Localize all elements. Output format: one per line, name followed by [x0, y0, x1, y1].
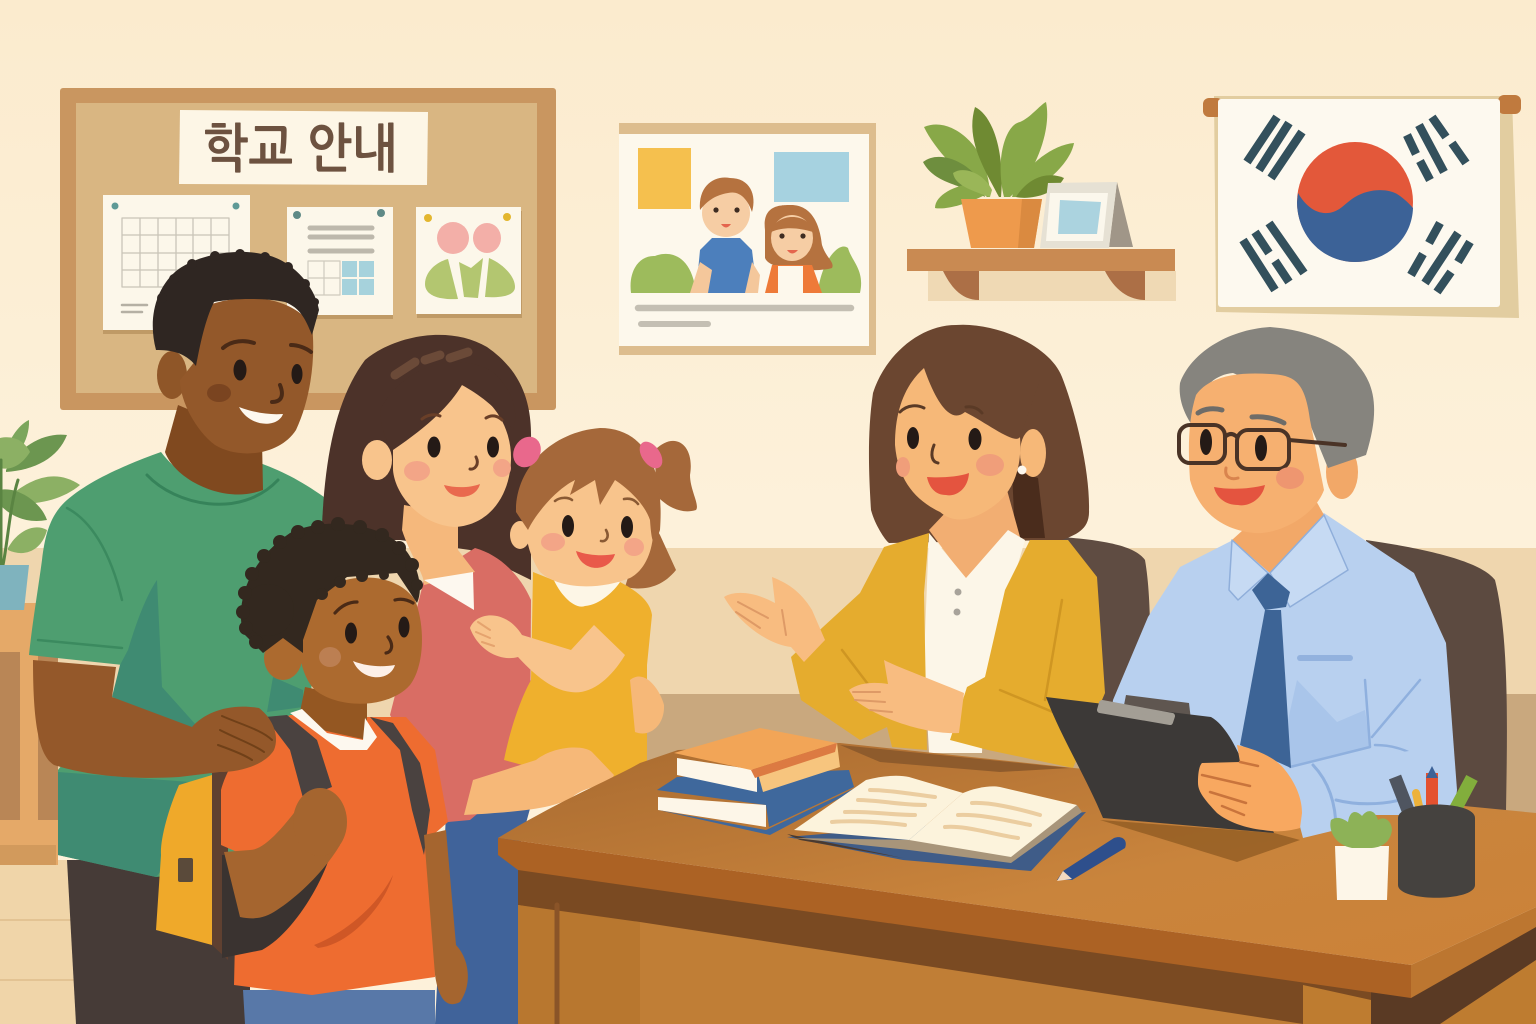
chair: principal	[1366, 540, 1507, 812]
principal neck	[1232, 490, 1324, 573]
mother ear	[362, 440, 392, 480]
girl pigtail	[655, 441, 697, 511]
clipboard shadow	[1100, 820, 1300, 862]
principal ear	[1326, 445, 1358, 499]
principal tie	[1240, 573, 1291, 768]
girl hair ties	[508, 432, 667, 472]
backpack body	[222, 850, 332, 958]
girl ear	[510, 521, 530, 549]
father eyes	[234, 360, 302, 384]
girl arm and hand	[470, 615, 625, 692]
sleeve cuff line	[1313, 765, 1400, 830]
boy collar	[290, 709, 377, 750]
boy eyes	[345, 616, 410, 644]
stacked books	[657, 728, 855, 835]
principal eyes	[1200, 429, 1267, 461]
boy hair	[236, 517, 423, 653]
principal pocket	[1300, 655, 1350, 661]
plant leaves	[923, 102, 1074, 208]
teacher mouth	[927, 473, 969, 495]
calendar paper	[103, 195, 250, 334]
principal mouth	[1214, 485, 1265, 505]
teacher blouse	[924, 530, 1025, 753]
shelf shadow	[928, 271, 1176, 301]
desk	[498, 743, 1536, 1024]
teacher brows and nose	[900, 406, 982, 463]
boy face	[299, 578, 422, 704]
teacher eyes	[907, 427, 982, 450]
boy ear	[264, 636, 302, 680]
board title paper	[179, 110, 428, 185]
principal nose	[1226, 468, 1238, 479]
mother jeans	[435, 805, 531, 1024]
teacher cardigan	[791, 533, 1105, 768]
teacher resting hand	[849, 660, 964, 733]
bulletin board	[60, 88, 556, 410]
father ear	[157, 351, 187, 399]
mother eyes	[428, 436, 499, 458]
left potted plant	[0, 420, 80, 610]
mother pink shirt	[390, 548, 531, 822]
mother cheeks	[404, 459, 511, 481]
girl collar	[553, 578, 620, 607]
girl smile	[576, 551, 615, 568]
mother's far hand	[630, 677, 664, 733]
left cabinet	[0, 603, 58, 865]
flag shadow	[1214, 96, 1519, 318]
teacher earring	[1018, 466, 1026, 474]
girl eyes	[562, 515, 633, 538]
father's arm and hand on boy's shoulder	[33, 660, 276, 778]
principal hair	[1180, 327, 1374, 468]
mother brows and nose	[422, 415, 502, 469]
book text lines	[832, 790, 1040, 838]
principal brows	[1198, 409, 1284, 423]
open book	[787, 776, 1086, 871]
girl	[470, 428, 697, 782]
poster girl	[765, 205, 833, 293]
boy smile	[353, 661, 395, 677]
principal man	[1100, 327, 1457, 837]
mother fringe	[380, 362, 515, 450]
teacher collar buttons	[954, 588, 962, 616]
small potted plant	[1330, 811, 1392, 900]
taegeuk	[1297, 142, 1413, 262]
desk top surface	[498, 743, 1536, 965]
teacher neck	[929, 490, 1020, 580]
backpack straps	[265, 715, 430, 855]
principal shirt	[1100, 513, 1457, 837]
mother neckline	[424, 572, 474, 610]
photo frame	[1040, 182, 1133, 248]
teacher shadow on desk	[840, 745, 1070, 772]
boy	[156, 517, 468, 1024]
mother face	[393, 385, 511, 527]
father smile	[239, 407, 283, 424]
desk leg	[554, 905, 560, 1024]
teacher open hand	[724, 577, 825, 662]
girl dress	[504, 572, 652, 782]
teacher hair back	[869, 325, 1089, 543]
backpack side strap	[212, 770, 228, 960]
notice paper	[287, 207, 393, 319]
mother neck	[402, 505, 475, 585]
cardigan folds	[842, 600, 1062, 715]
boy far arm and hand	[424, 830, 468, 1004]
backpack buckle	[178, 858, 193, 882]
principal hand	[1198, 745, 1302, 831]
trigrams	[1243, 117, 1470, 292]
father neck	[165, 405, 263, 495]
backpack pocket	[156, 775, 212, 945]
boy orange shirt	[221, 715, 448, 995]
flag rod ends	[1203, 95, 1521, 117]
boy cheek	[319, 647, 341, 667]
boy shirt fold	[314, 875, 393, 948]
father cheek	[207, 384, 231, 402]
teacher woman	[724, 325, 1105, 768]
man: father	[29, 249, 324, 1024]
board title paper: 학교 안내	[203, 120, 397, 179]
boy jeans	[243, 990, 435, 1024]
upper orange book	[674, 728, 840, 792]
shirt shading and folds	[1288, 680, 1427, 767]
pencil cup	[1395, 766, 1475, 898]
girl face	[526, 478, 653, 586]
father trousers	[67, 860, 250, 1024]
lower blue book	[657, 770, 855, 835]
girl hair	[516, 428, 661, 542]
teacher face	[895, 368, 1020, 519]
chair: teacher	[1062, 537, 1150, 720]
boy near arm and hand	[224, 788, 347, 918]
poster boy	[690, 177, 760, 293]
principal collar	[1229, 515, 1348, 607]
Korean flag	[1203, 95, 1521, 318]
father green shirt	[29, 452, 324, 877]
teacher inner hair	[1012, 470, 1045, 538]
shelf with plant and photo frame	[907, 102, 1176, 301]
principal face	[1189, 373, 1324, 533]
desk right side	[1411, 907, 1536, 998]
teacher ear	[1020, 429, 1046, 477]
mother smile	[444, 484, 480, 497]
desk right leg	[1371, 925, 1536, 1024]
pen	[1057, 837, 1126, 881]
plant pot	[961, 199, 1042, 248]
poster: two children	[619, 123, 876, 355]
desk under-shadow	[518, 868, 1371, 1024]
mother's near arm and hand	[464, 747, 614, 815]
principal shirt sleeve	[1285, 745, 1454, 838]
boy neck	[300, 687, 367, 740]
shelf	[907, 249, 1175, 300]
woman: mother	[322, 335, 531, 1024]
clipboard	[1046, 695, 1274, 833]
teacher cheeks	[896, 454, 1004, 477]
principal hand on clipboard	[1198, 745, 1454, 838]
father hair	[153, 249, 319, 366]
principal cheek	[1276, 467, 1304, 489]
father face	[180, 298, 313, 453]
father brows and nose	[223, 341, 311, 402]
boy brows and nose	[335, 599, 413, 653]
principal glasses	[1179, 425, 1345, 469]
girl cheeks	[541, 533, 644, 556]
flower paper	[416, 207, 522, 318]
desk front edge	[498, 838, 1411, 998]
girl brows and nose	[555, 498, 638, 541]
girl back hair	[625, 500, 676, 588]
desk front panel	[518, 870, 1536, 1024]
teacher fringe	[924, 345, 1040, 439]
mother hair back	[322, 335, 531, 580]
